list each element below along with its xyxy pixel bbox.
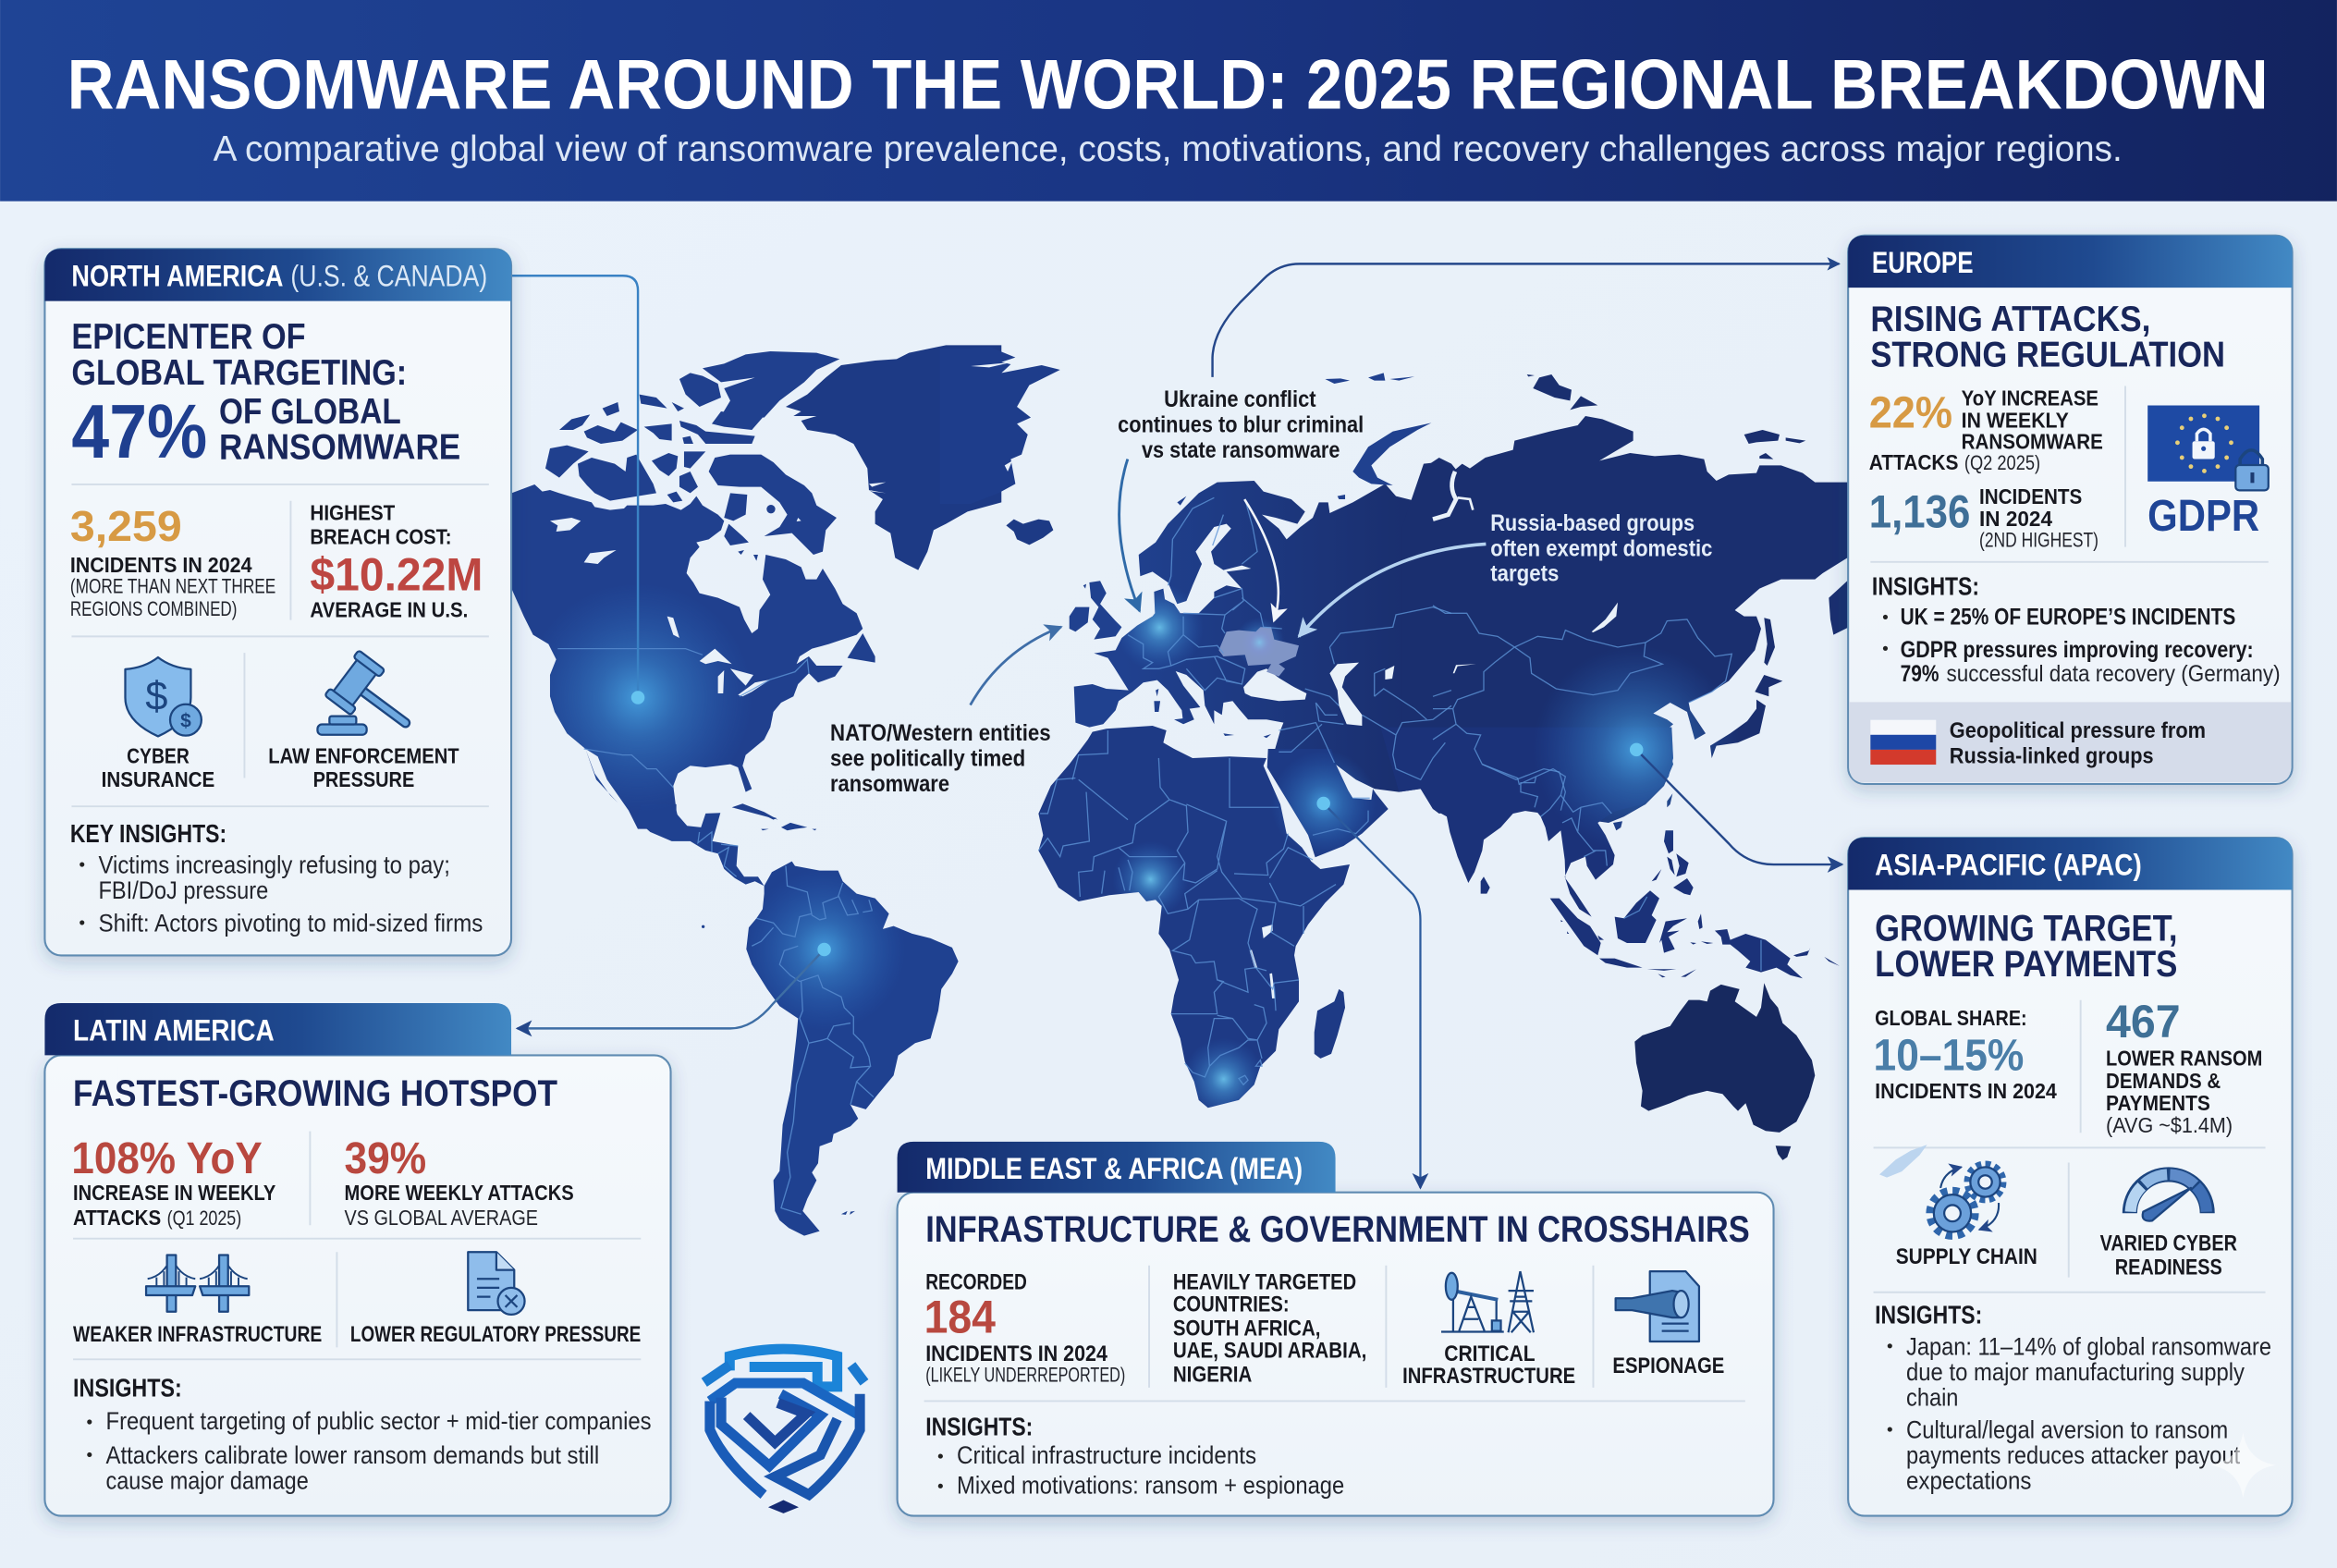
panel: Latin America: [44, 1003, 671, 1516]
stat: 467 incidents: LOWER RANSOM: [2106, 1047, 2262, 1071]
label: cyber insurance: [102, 743, 214, 791]
watermark sparkle: [2210, 1432, 2276, 1498]
stat: incidents: INCIDENTS: [1979, 484, 2082, 508]
headline: [71, 317, 460, 474]
key insights: FBI/DoJ pressure: [98, 876, 268, 904]
stat: 467 incidents: [2106, 996, 2262, 1137]
geopolitical note with Russian flag: Geopolitical pressure from: [1950, 718, 2206, 743]
stat: breach cost: AVERAGE IN U.S.: [310, 597, 468, 621]
callout: NATO Western entities: NATO/Western entities: [830, 720, 1051, 746]
headline: LOWER PAYMENTS: [1875, 943, 2177, 985]
regional hotspot glows: [521, 582, 1741, 1121]
stat: 108% YoY: 108% YoY: [71, 1133, 263, 1183]
geopolitical note with Russian flag: Russia-linked groups: [1950, 743, 2154, 768]
insights: 79%: [1901, 661, 1939, 687]
callout: NATO Western entities: see politically timed: [830, 746, 1025, 772]
stat: breach cost: BREACH COST:: [310, 524, 452, 548]
borders: Canada and USA: [557, 649, 809, 788]
label: varied cyber readiness: VARIED CYBER: [2100, 1231, 2237, 1256]
stat: incidents: INCIDENTS IN 2024: [70, 553, 252, 577]
headline: 47%: [71, 390, 207, 474]
hotspot dots: [631, 691, 1643, 956]
icon: cyber insurance shield: [125, 657, 202, 736]
stat: 108% YoY: ATTACKS: [73, 1206, 161, 1230]
callout: Russia-based groups: [1490, 510, 1713, 587]
callout: Russia-based groups: Russia-based groups: [1490, 510, 1695, 536]
callout: Ukraine conflict: Ukraine conflict: [1164, 386, 1316, 412]
headline: GROWING TARGET,: [1875, 907, 2177, 949]
stat: recorded incidents: 184: [924, 1291, 996, 1342]
stat: incidents: [70, 502, 275, 620]
borders: Europe and western Asia: [1072, 497, 1451, 779]
headline: FASTEST-GROWING HOTSPOT: [73, 1073, 557, 1114]
stat: incidents: (2ND HIGHEST): [1979, 529, 2098, 552]
Eurasia: South and Southeast Asia land: [1380, 728, 1840, 1160]
borders: Latin America: [698, 832, 874, 1214]
icon: gavel: [317, 650, 406, 735]
insights: Attackers calibrate lower ransom demands but still: [106, 1441, 599, 1469]
stat: yearly increase: (Q2 2025): [1964, 451, 2040, 474]
headline: GLOBAL TARGETING:: [71, 353, 407, 393]
panel tab: [898, 1142, 1336, 1198]
insights: [925, 1413, 1344, 1499]
insights: due to major manufacturing supply: [1906, 1358, 2245, 1386]
stat: 108% YoY: (Q1 2025): [167, 1207, 241, 1230]
labels: weaker infrastructure and lower regulatory pressure: [73, 1322, 641, 1347]
connector: Europe: [1213, 263, 1839, 377]
icon: cyber insurance shield: $: [180, 711, 191, 732]
stat: incidents: 3,259: [70, 502, 182, 550]
insights: Japan: 11–14% of global ransomware: [1906, 1332, 2271, 1360]
panel: Middle East and Africa: [898, 1142, 1774, 1516]
borders: Africa: [1038, 758, 1370, 1084]
insights: INSIGHTS:: [1872, 571, 1979, 600]
European islands, inland seas and borders: [940, 347, 1451, 779]
panel header: NORTH AMERICA: [71, 260, 283, 293]
panel header: EUROPE: [1872, 246, 1974, 279]
geopolitical note with Russian flag: [1850, 702, 2291, 782]
callout: Ukraine conflict: vs state ransomware: [1142, 437, 1340, 463]
icon: cyber insurance shield: $: [145, 674, 167, 718]
headline: STRONG REGULATION: [1870, 336, 2225, 375]
stat: global share: GLOBAL SHARE:: [1875, 1006, 2027, 1030]
stat: 467 incidents: 467: [2106, 996, 2181, 1047]
label: varied cyber readiness: READINESS: [2115, 1255, 2222, 1280]
borders: central and East Asia: [1433, 606, 1731, 811]
headline: [1875, 907, 2177, 985]
insights: Critical infrastructure incidents: [957, 1441, 1256, 1469]
stat: recorded incidents: INCIDENTS IN 2024: [925, 1341, 1107, 1366]
key insights: [70, 819, 483, 937]
Eurasia: Russia and East Asia land: [1402, 374, 1879, 823]
stat: yearly increase: YoY INCREASE: [1962, 386, 2098, 410]
header banner: [0, 0, 2337, 202]
stat: 39%: MORE WEEKLY ATTACKS: [344, 1181, 574, 1205]
stat: incidents: [1869, 484, 2098, 552]
heavily targeted countries: UAE, SAUDI ARABIA,: [1173, 1339, 1366, 1364]
stat: global share: INCIDENTS IN 2024: [1875, 1079, 2057, 1103]
stat: breach cost: HIGHEST: [310, 501, 396, 525]
insights: INSIGHTS:: [925, 1413, 1033, 1441]
label: critical infrastructure: CRITICAL: [1444, 1341, 1536, 1366]
stat: global share: [1874, 1006, 2057, 1103]
headline: OF GLOBAL: [219, 392, 401, 432]
label: GDPR: GDPR: [2147, 491, 2259, 541]
Ukraine highlight: [1218, 627, 1299, 677]
stat: breach cost: [310, 501, 483, 621]
insights: successful data recovery (Germany): [1947, 661, 2281, 687]
label: critical infrastructure: [1402, 1341, 1575, 1389]
panel tab: LATIN AMERICA: [73, 1013, 275, 1047]
label: varied cyber readiness: [2100, 1231, 2237, 1280]
Central and South America: [636, 804, 959, 1236]
headline: [1870, 300, 2225, 375]
stat: 39%: 39%: [344, 1133, 426, 1183]
label: critical infrastructure: INFRASTRUCTURE: [1402, 1364, 1575, 1389]
labels: weaker infrastructure and lower regulatory pressure: LOWER REGULATORY PRESSURE: [350, 1322, 641, 1347]
stat: 108% YoY: [71, 1133, 276, 1230]
panel tab: MIDDLE EAST & AFRICA (MEA): [925, 1152, 1303, 1185]
label: cyber insurance: CYBER: [127, 743, 190, 767]
stat: breach cost: $10.22M: [310, 548, 483, 600]
labels: weaker infrastructure and lower regulatory pressure: WEAKER INFRASTRUCTURE: [73, 1322, 322, 1347]
panel tab: [44, 1003, 511, 1061]
panel header: (U.S. & CANADA): [290, 260, 487, 293]
Asian gulfs, lakes and borders: [1433, 472, 1731, 811]
connector: North America: [511, 276, 638, 697]
stat: 39%: VS GLOBAL AVERAGE: [344, 1206, 538, 1230]
panel: North America: [44, 249, 511, 955]
insights: Cultural/legal aversion to ransom: [1906, 1416, 2228, 1444]
stat: yearly increase: 22%: [1869, 388, 1952, 438]
heavily targeted countries: HEAVILY TARGETED: [1173, 1270, 1356, 1295]
callout: Ukraine conflict: continues to blur criminal: [1118, 412, 1364, 438]
callout: NATO Western entities: ransomware: [830, 771, 949, 797]
stat: incidents: 1,136: [1869, 486, 1970, 538]
connector: Middle East and Africa: [1324, 803, 1420, 1188]
label: law enforcement pressure: PRESSURE: [313, 767, 414, 791]
headline: RANSOMWARE: [219, 428, 460, 468]
connector: Latin America: [517, 949, 825, 1028]
stat: 39%: [344, 1133, 574, 1230]
stat: yearly increase: IN WEEKLY: [1962, 409, 2069, 433]
insights: cause major damage: [106, 1467, 309, 1495]
arrow: Ukraine conflict: [1244, 499, 1279, 621]
stat: yearly increase: RANSOMWARE: [1962, 429, 2103, 453]
stat: incidents: REGIONS COMBINED): [70, 597, 237, 620]
panel: Asia-Pacific: [1848, 838, 2293, 1516]
icon: broken bridge: [146, 1255, 249, 1312]
logo: shield emblem: [704, 1349, 864, 1513]
heavily targeted countries: NIGERIA: [1173, 1362, 1252, 1387]
headline: RISING ATTACKS,: [1870, 300, 2150, 339]
heavily targeted countries: SOUTH AFRICA,: [1173, 1317, 1320, 1341]
insights: INSIGHTS:: [73, 1374, 182, 1403]
panel: Europe: [1848, 236, 2293, 784]
insights: payments reduces attacker payout: [1906, 1441, 2241, 1469]
arrow: Ukraine to Germany: [1120, 459, 1140, 611]
panel header: ASIA-PACIFIC (APAC): [1875, 848, 2142, 881]
stat: incidents: (MORE THAN NEXT THREE: [70, 575, 275, 598]
insights: UK = 25% OF EUROPE’S INCIDENTS: [1901, 604, 2235, 630]
stat: yearly increase: ATTACKS: [1869, 450, 1958, 474]
heavily targeted countries: [1173, 1270, 1366, 1387]
headline: EPICENTER OF: [71, 317, 306, 357]
faded island behind panel: [1879, 1145, 1927, 1178]
icon: espionage document with spyglass: [1616, 1271, 1699, 1341]
insights: [1875, 1301, 2271, 1495]
stat: 467 incidents: DEMANDS &: [2106, 1069, 2221, 1093]
panel header: [1848, 838, 2293, 889]
stat: recorded incidents: [924, 1270, 1125, 1386]
key insights: Victims increasingly refusing to pay;: [98, 851, 450, 879]
insights: [73, 1374, 652, 1495]
icon: readiness gauge: [2130, 1174, 2208, 1221]
callout: Russia-based groups: targets: [1490, 561, 1559, 587]
insights: GDPR pressures improving recovery:: [1901, 637, 2254, 663]
panel header: [44, 249, 511, 301]
stat: incidents: IN 2024: [1979, 507, 2052, 531]
panel header: [1848, 236, 2293, 288]
icon: regulatory document: [468, 1252, 525, 1315]
insights: chain: [1906, 1383, 1958, 1411]
North America and Greenland west: [490, 345, 1001, 829]
borders: South and Southeast Asia: [1482, 765, 1761, 971]
label: espionage: ESPIONAGE: [1612, 1354, 1724, 1378]
arrow: Russia groups: [1299, 544, 1486, 636]
headline: INFRASTRUCTURE & GOVERNMENT IN CROSSHAIRS: [925, 1208, 1750, 1250]
stat: recorded incidents: RECORDED: [925, 1270, 1027, 1295]
Australia and Tasmania: [1634, 983, 1815, 1160]
icon: EU flag with lock: [2147, 406, 2269, 490]
callout: Ukraine conflict: [1118, 386, 1364, 463]
key insights: KEY INSIGHTS:: [70, 819, 226, 848]
stat: 467 incidents: PAYMENTS: [2106, 1091, 2210, 1115]
Africa land: [1038, 726, 1350, 1108]
heavily targeted countries: COUNTRIES:: [1173, 1292, 1290, 1317]
world map: [490, 345, 1879, 1236]
icon: oil pump and pylon: [1441, 1271, 1534, 1332]
callout: NATO Western entities: [830, 720, 1051, 797]
stat: recorded incidents: (LIKELY UNDERREPORTED): [925, 1363, 1125, 1386]
label: law enforcement pressure: LAW ENFORCEMENT: [268, 743, 459, 767]
Arabia land and African borders: [1038, 749, 1389, 1084]
Eurasia: Europe and western Asia land: [1074, 458, 1495, 814]
insights: Mixed motivations: ransom + espionage: [957, 1471, 1344, 1499]
label: supply chain: SUPPLY CHAIN: [1896, 1244, 2037, 1269]
insights: Frequent targeting of public sector + mid-tier companies: [106, 1407, 652, 1435]
stat: 467 incidents: (AVG ~$1.4M): [2106, 1113, 2233, 1137]
callout: Russia-based groups: often exempt domestic: [1490, 535, 1713, 561]
connector: Asia-Pacific: [1636, 750, 1842, 864]
stat: global share: 10–15%: [1874, 1031, 2024, 1081]
label: cyber insurance: INSURANCE: [102, 767, 214, 791]
stat: 108% YoY: INCREASE IN WEEKLY: [73, 1181, 276, 1205]
key insights: Shift: Actors pivoting to mid-sized firms: [98, 910, 483, 937]
arrow: NATO callout: [971, 627, 1061, 705]
icon: supply chain gears: [1930, 1164, 2003, 1235]
label: law enforcement pressure: [268, 743, 459, 791]
insights: INSIGHTS:: [1875, 1301, 1982, 1329]
subtitle: A comparative global view of ransomware prevalence, costs, motivations, and recovery challenges across major regions.: [214, 129, 2123, 169]
stat: yearly increase: [1869, 386, 2103, 474]
insights: expectations: [1906, 1467, 2031, 1495]
insights: [1872, 571, 2281, 687]
